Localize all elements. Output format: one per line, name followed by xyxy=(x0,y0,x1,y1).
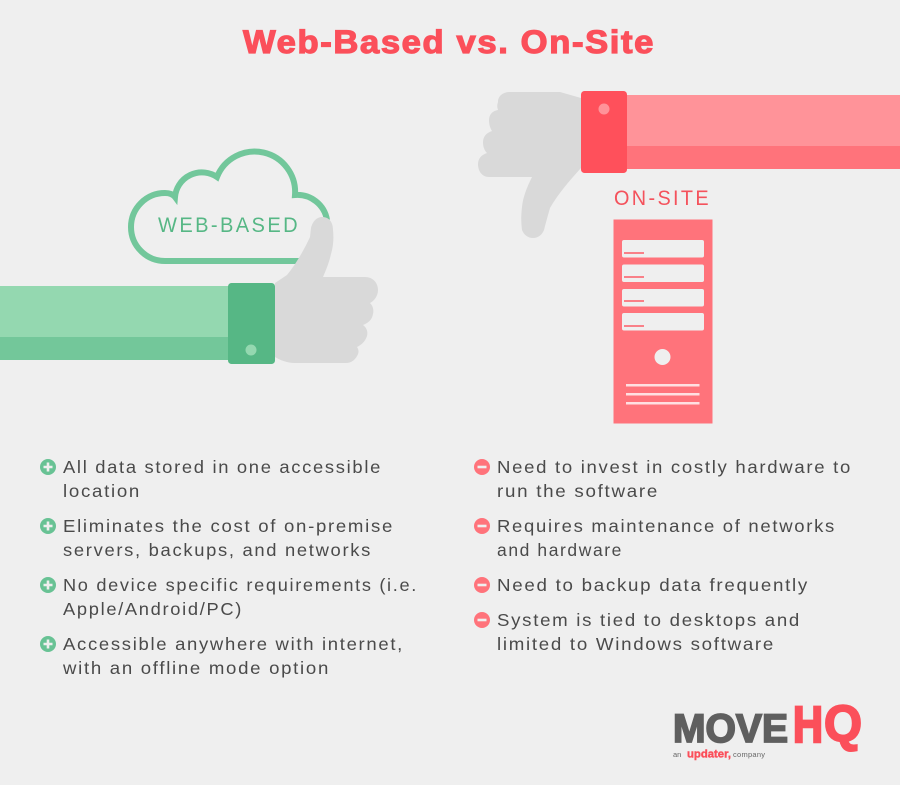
arm sleeve xyxy=(627,95,900,169)
icon: server tower xyxy=(614,220,712,424)
con item 2: and hardware xyxy=(497,540,623,560)
pro item 4: Accessible anywhere with internet, xyxy=(63,634,404,654)
logo tagline: an xyxy=(673,750,681,759)
sleeve cuff xyxy=(581,91,627,173)
logo tagline: company xyxy=(733,750,765,759)
con item 3: Need to backup data frequently xyxy=(497,575,809,595)
con item 1 xyxy=(474,457,852,501)
icon: thumbs up hand xyxy=(275,217,378,363)
icon: thumbs down hand xyxy=(478,92,581,238)
con item 1: Need to invest in costly hardware to xyxy=(497,457,852,477)
pro item 2: Eliminates the cost of on-premise xyxy=(63,516,394,536)
logo wordmark H: H xyxy=(793,696,823,753)
cloud label: WEB-BASED xyxy=(158,214,300,237)
icon: cloud outline xyxy=(131,152,327,261)
logo wordmark MOVE: MOVE xyxy=(673,707,788,751)
logo: MoveHQ xyxy=(673,695,862,760)
pro item 4: with an offline mode option xyxy=(62,658,330,678)
arm sleeve xyxy=(0,286,230,360)
con item 2: Requires maintenance of networks xyxy=(497,516,836,536)
on-site label: ON-SITE xyxy=(614,187,711,210)
pro item 3: No device specific requirements (i.e. xyxy=(63,575,418,595)
con item 4: System is tied to desktops and xyxy=(497,610,801,630)
logo wordmark Q: Q xyxy=(824,695,862,752)
pro item 1: location xyxy=(63,481,141,501)
list: web-based pros xyxy=(40,457,418,678)
pro item 2 xyxy=(40,516,394,560)
pro item 3: Apple/Android/PC) xyxy=(63,599,243,619)
panel: on-site illustration xyxy=(478,91,900,424)
panel: web-based illustration xyxy=(0,152,378,364)
con item 2 xyxy=(474,516,836,560)
title: Web-Based vs. On-Site xyxy=(243,24,655,60)
pro item 1 xyxy=(40,457,382,501)
logo tagline xyxy=(673,748,765,760)
logo tagline: updater, xyxy=(687,748,731,760)
con item 4 xyxy=(474,610,801,654)
pro item 1: All data stored in one accessible xyxy=(63,457,382,477)
pro item 2: servers, backups, and networks xyxy=(63,540,372,560)
pro item 3 xyxy=(40,575,418,619)
con item 1: run the software xyxy=(497,481,659,501)
sleeve cuff xyxy=(228,283,275,364)
list: on-site cons xyxy=(474,457,852,654)
pro item 4 xyxy=(40,634,404,678)
con item 4: limited to Windows software xyxy=(497,634,775,654)
